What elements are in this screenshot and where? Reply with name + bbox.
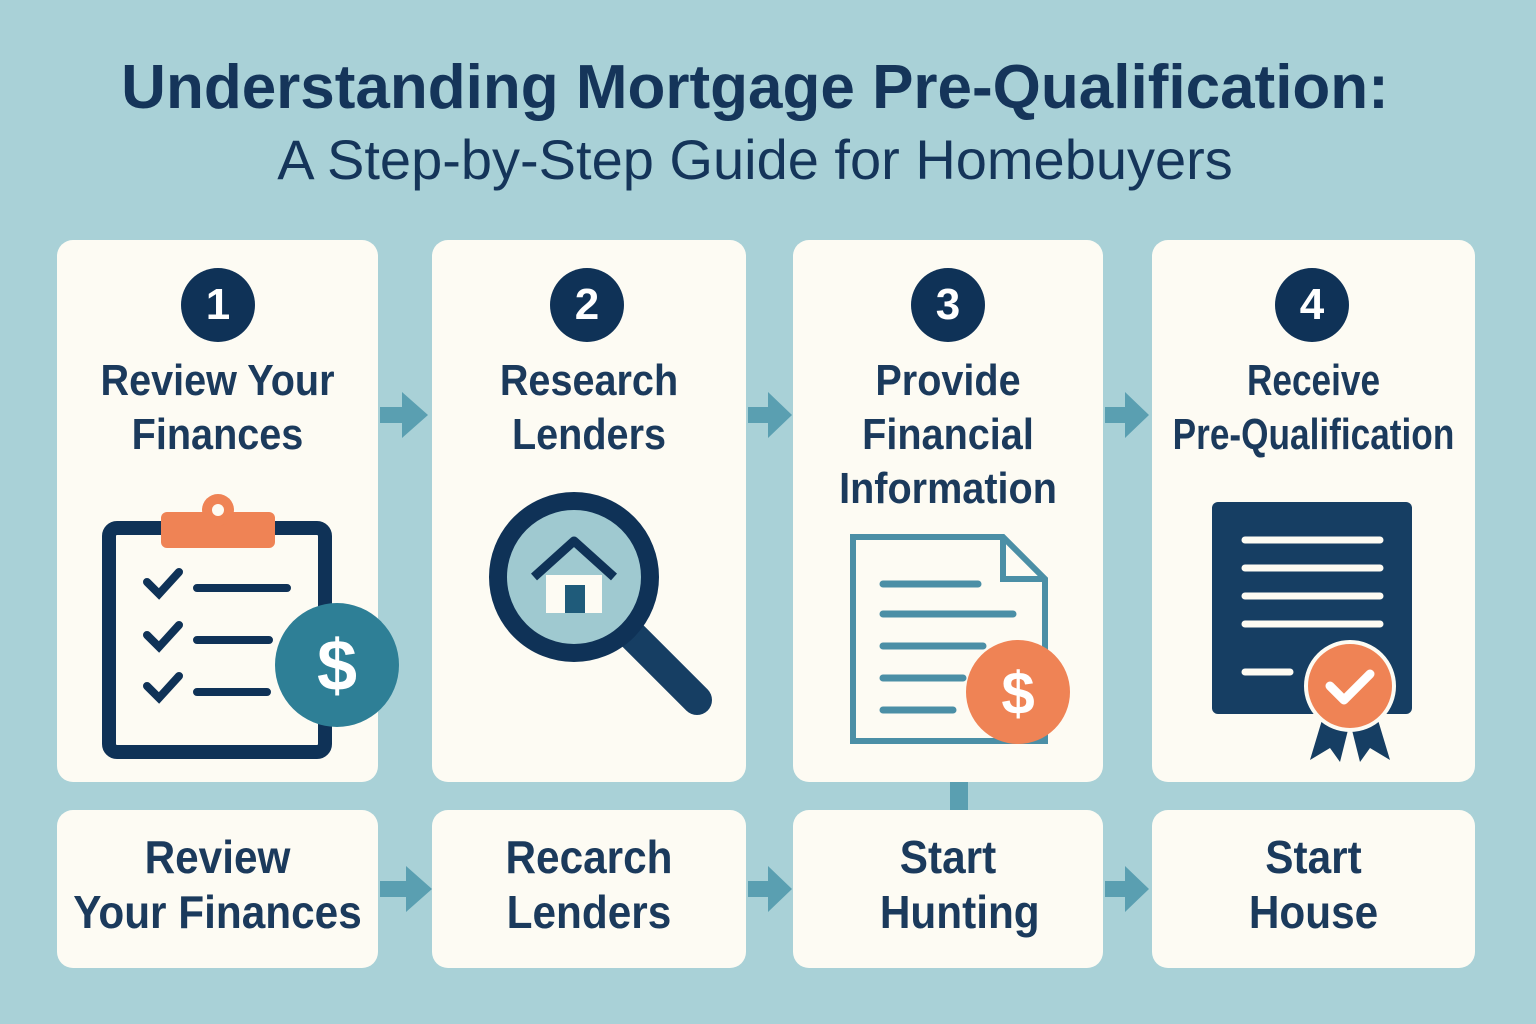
number 2: 2 — [575, 280, 599, 329]
arrow 2-3 top — [748, 392, 792, 438]
text: start house: House — [1249, 886, 1378, 938]
heading 4 — [1173, 356, 1454, 459]
panel: bottom 2 — [432, 810, 746, 968]
text: recarch lenders — [505, 831, 673, 938]
text: review finances: Your Finances — [73, 886, 362, 938]
icon: document with dollar — [850, 534, 1070, 744]
panel: step 2 — [432, 240, 746, 782]
connector 3 — [950, 782, 968, 810]
text: start hunting: Start — [900, 831, 996, 883]
heading 3: Provide — [875, 356, 1021, 405]
arrow bottom 2-3 — [748, 866, 792, 912]
panel: bottom 1 — [57, 810, 378, 968]
number 4: 4 — [1300, 280, 1324, 329]
text: start house — [1249, 831, 1378, 938]
number 3 — [911, 268, 985, 342]
text: recarch lenders: Recarch — [505, 831, 673, 883]
icon: certificate with badge — [1212, 502, 1412, 762]
text: start hunting — [880, 831, 1040, 938]
title: Understanding Mortgage Pre-Qualification: — [121, 53, 1389, 122]
arrow 3-4 top — [1105, 392, 1149, 438]
title — [121, 53, 1389, 191]
heading 1: Finances — [132, 410, 303, 459]
icon: document with dollar: $ — [1001, 660, 1035, 727]
icon: clipboard with dollar — [102, 494, 399, 759]
heading 2 — [500, 356, 678, 459]
heading 4: Pre-Qualification — [1173, 410, 1454, 459]
heading 3: Information — [839, 464, 1057, 513]
heading 2: Research — [500, 356, 678, 405]
text: start house: Start — [1265, 831, 1362, 883]
number 4 — [1275, 268, 1349, 342]
text: recarch lenders: Lenders — [507, 886, 671, 938]
heading 3 — [839, 356, 1057, 513]
panel: bottom 3 — [793, 810, 1103, 968]
heading 1: Review Your — [100, 356, 335, 405]
number 1 — [181, 268, 255, 342]
heading 2: Lenders — [512, 410, 666, 459]
heading 3: Financial — [862, 410, 1034, 459]
number 1: 1 — [206, 280, 230, 329]
text: review finances — [73, 831, 362, 938]
arrow bottom 1-2 — [380, 866, 432, 912]
panel: step 4 — [1152, 240, 1475, 782]
panel: step 1 — [57, 240, 378, 782]
title: A Step-by-Step Guide for Homebuyers — [277, 128, 1233, 191]
icon: clipboard with dollar: $ — [317, 626, 357, 706]
heading 4: Receive — [1247, 356, 1380, 405]
text: review finances: Review — [145, 831, 290, 883]
heading 1 — [100, 356, 335, 459]
panel: step 3 — [793, 240, 1103, 782]
arrow 1-2 top — [380, 392, 428, 438]
icon: magnifier with house — [489, 492, 712, 715]
text: start hunting: Hunting — [880, 886, 1040, 938]
number 3: 3 — [936, 280, 960, 329]
number 2 — [550, 268, 624, 342]
panel: bottom 4 — [1152, 810, 1475, 968]
arrow bottom 3-4 — [1105, 866, 1149, 912]
